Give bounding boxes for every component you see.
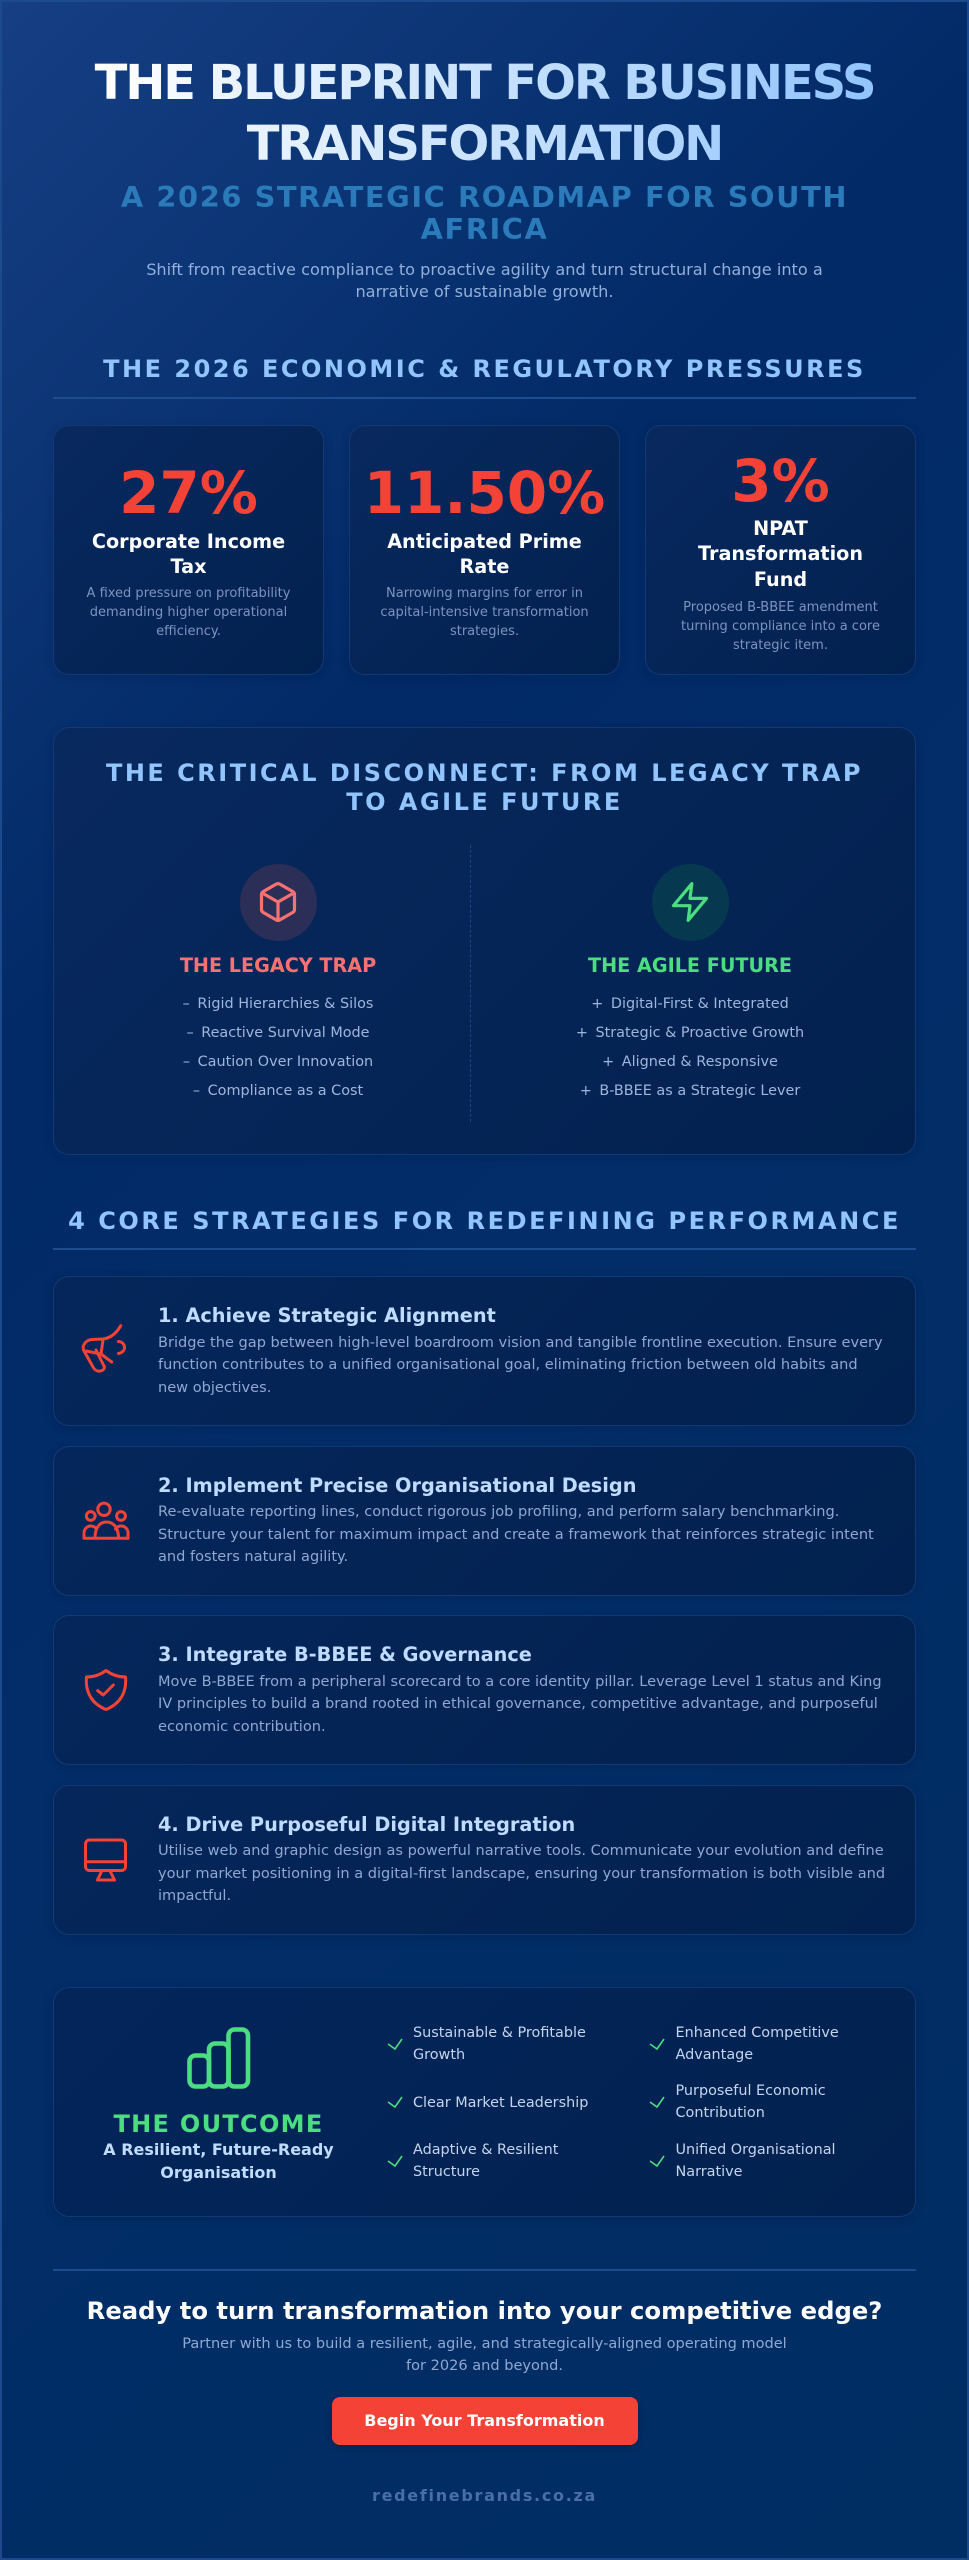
outcome subtitle — [103, 2140, 334, 2182]
title — [60, 53, 909, 176]
legacy list: – Compliance as a Cost — [193, 1083, 363, 1099]
disconnect heading — [106, 759, 863, 816]
stat description: Proposed B-BBEE amendment — [683, 600, 878, 614]
strategy 1 text — [158, 1334, 883, 1396]
stat value 11.50%: 11.50% — [364, 459, 605, 527]
stat description: capital-intensive transformation — [380, 605, 589, 620]
strategy 2 text: Re-evaluate reporting lines, conduct rigorous job profiling, and perform salary benchmarking. — [158, 1503, 839, 1520]
strategy 2 text — [158, 1503, 874, 1565]
checklist item — [650, 2083, 826, 2121]
icon: shield check — [84, 1669, 128, 1711]
strategy 4 text: Utilise web and graphic design as powerful narrative tools. Communicate your evolution and define — [158, 1842, 884, 1859]
icon circle: legacy — [240, 864, 316, 940]
stat description: strategies. — [450, 624, 519, 639]
panel: critical disconnect — [53, 727, 916, 1155]
strategy 3 text: economic contribution. — [158, 1718, 326, 1735]
panel: strategy 1 — [53, 1276, 916, 1426]
panel: strategy 2 — [53, 1446, 916, 1596]
panel: strategy 4 — [53, 1784, 916, 1934]
checklist item: Clear Market Leadership — [413, 2095, 588, 2111]
checklist item: Narrative — [676, 2164, 742, 2180]
legacy heading: THE LEGACY TRAP — [180, 954, 376, 977]
strategy 4 text: impactful. — [158, 1887, 231, 1904]
stat value 3%: 3% — [731, 447, 830, 515]
call to action text: Partner with us to build a resilient, agile, and strategically-aligned operating model — [182, 2334, 787, 2352]
stat description: A fixed pressure on profitability — [87, 586, 290, 601]
agile list: + Aligned & Responsive — [602, 1054, 778, 1070]
stat description: strategic item. — [733, 638, 828, 653]
checklist item: Enhanced Competitive — [676, 2025, 839, 2041]
checklist item: Purposeful Economic — [676, 2083, 826, 2099]
subtitle — [121, 180, 848, 246]
icon circle: agile — [652, 864, 728, 940]
icon: bar chart — [187, 2027, 250, 2089]
stat label — [387, 530, 582, 578]
stat label: Corporate Income — [92, 530, 285, 553]
strategy 3 text — [158, 1673, 882, 1735]
panel: stat corporate income tax — [53, 425, 324, 675]
strategy 3 text: Move B-BBEE from a peripheral scorecard to a core identity pillar. Leverage Level 1 status and King — [158, 1673, 882, 1690]
legacy list: – Rigid Hierarchies & Silos — [183, 996, 373, 1012]
strategy 3 heading: 3. Integrate B-BBEE & Governance — [158, 1643, 532, 1666]
panel: the outcome — [53, 1987, 916, 2217]
strategy 4 text: your market positioning in a digital-first landscape, ensuring your transformation is both visible and — [158, 1865, 885, 1882]
checklist item: Sustainable & Profitable — [413, 2025, 586, 2041]
strategy 2 heading: 2. Implement Precise Organisational Design — [158, 1474, 636, 1497]
checklist item: Unified Organisational — [676, 2142, 836, 2158]
checklist item: Structure — [413, 2164, 480, 2180]
strategy 2 text: and fosters natural agility. — [158, 1548, 348, 1565]
agile list: + Digital-First & Integrated — [591, 996, 789, 1012]
agile heading: THE AGILE FUTURE — [588, 954, 792, 977]
panel: stat transformation fund — [645, 425, 916, 675]
footer website: redefinebrands.co.za — [372, 2486, 597, 2504]
checklist item: Adaptive & Resilient — [413, 2142, 558, 2158]
legacy list: – Reactive Survival Mode — [186, 1025, 370, 1041]
stat label — [92, 530, 285, 578]
column: legacy trap — [180, 864, 376, 1099]
call to action heading: Ready to turn transformation into your competitive edge? — [87, 2296, 882, 2325]
checklist item: Contribution — [676, 2105, 765, 2121]
strategy 1 text: new objectives. — [158, 1379, 271, 1396]
agile list: + Strategic & Proactive Growth — [576, 1025, 804, 1041]
checklist item: Advantage — [676, 2047, 753, 2063]
checklist item — [388, 2142, 558, 2180]
stat description: Narrowing margins for error in — [386, 586, 583, 601]
legacy list: – Caution Over Innovation — [183, 1054, 373, 1070]
section heading: pressures: THE 2026 ECONOMIC & REGULATORY PRESSURES — [103, 355, 866, 383]
outcome heading: THE OUTCOME — [113, 2110, 324, 2138]
agile list: + B-BBEE as a Strategic Lever — [580, 1083, 800, 1099]
stat label: NPAT — [753, 517, 808, 540]
strategy 4 text — [158, 1842, 885, 1904]
stat description — [86, 586, 290, 639]
disconnect heading: TO AGILE FUTURE — [346, 788, 623, 816]
checklist item — [650, 2142, 836, 2180]
icon: monitor — [84, 1838, 127, 1882]
panel: stat prime rate — [349, 425, 620, 675]
icon: lightning bolt — [672, 882, 708, 922]
intro text: narrative of sustainable growth. — [355, 282, 614, 301]
title: TRANSFORMATION — [247, 116, 722, 172]
outcome subtitle: Organisation — [160, 2163, 277, 2182]
stat description — [380, 586, 589, 639]
strategy 1 text: Bridge the gap between high-level boardroom vision and tangible frontline execution. Ensure every — [158, 1334, 883, 1351]
stat label: Transformation — [698, 542, 863, 565]
checklist item — [650, 2025, 839, 2063]
intro text — [146, 260, 823, 301]
stat description: turning compliance into a core — [681, 619, 880, 634]
icon: people — [82, 1502, 130, 1540]
checklist item — [388, 2025, 586, 2063]
icon: megaphone — [82, 1324, 126, 1373]
button — [332, 2397, 638, 2445]
outcome subtitle: A Resilient, Future-Ready — [103, 2140, 334, 2159]
icon: box — [260, 882, 296, 922]
legacy list — [183, 996, 373, 1099]
stat label: Fund — [754, 568, 807, 591]
subtitle: A 2026 STRATEGIC ROADMAP FOR SOUTH — [121, 180, 848, 214]
stat label — [698, 517, 863, 591]
button: Begin Your Transformation — [364, 2411, 605, 2430]
call to action text — [182, 2334, 787, 2374]
stat label: Tax — [171, 555, 206, 578]
strategy 1 heading: 1. Achieve Strategic Alignment — [158, 1304, 496, 1327]
section heading: strategies: 4 CORE STRATEGIES FOR REDEFINING PERFORMANCE — [68, 1207, 901, 1235]
disconnect heading: THE CRITICAL DISCONNECT: FROM LEGACY TRAP — [106, 759, 863, 787]
strategy 3 text: IV principles to build a brand rooted in ethical governance, competitive advantage, and purposeful — [158, 1695, 878, 1712]
subtitle: AFRICA — [421, 212, 548, 246]
strategy 1 text: function contributes to a unified organisational goal, eliminating friction between old habits and — [158, 1356, 858, 1373]
agile list — [576, 996, 804, 1099]
stat label: Anticipated Prime — [387, 530, 582, 553]
strategy 2 text: Structure your talent for maximum impact and create a framework that reinforces strategic intent — [158, 1526, 874, 1543]
title: THE BLUEPRINT FOR BUSINESS — [95, 55, 874, 111]
stat description: efficiency. — [156, 624, 221, 639]
intro text: Shift from reactive compliance to proactive agility and turn structural change into a — [146, 260, 823, 279]
column: agile future — [576, 864, 804, 1099]
panel: strategy 3 — [53, 1615, 916, 1765]
stat description — [681, 600, 880, 653]
strategy 4 heading: 4. Drive Purposeful Digital Integration — [158, 1813, 575, 1836]
checklist item: Growth — [413, 2047, 465, 2063]
stat label: Rate — [460, 555, 509, 578]
call to action text: for 2026 and beyond. — [406, 2357, 563, 2374]
stat value 27%: 27% — [119, 459, 258, 527]
stat description: demanding higher operational — [90, 605, 287, 620]
